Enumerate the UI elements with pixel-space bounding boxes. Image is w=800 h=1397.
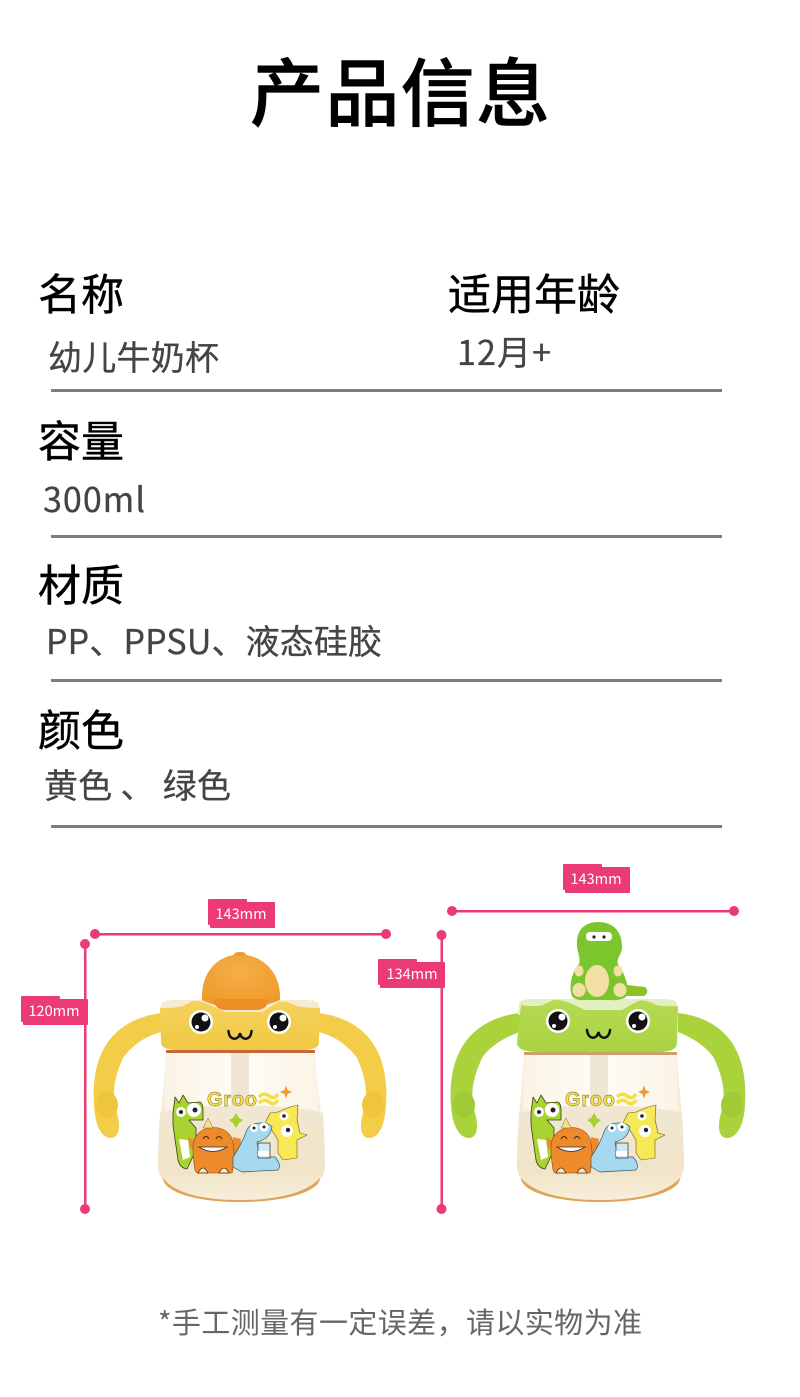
dimension: yellow width 143mm: 143mm: [216, 903, 266, 924]
cartoon print: [531, 1085, 665, 1173]
dimension: green height 134mm: [378, 930, 446, 1214]
spec: colour: 颜色: [38, 697, 124, 759]
dimension: yellow width 143mm: [90, 899, 391, 939]
spec: name: 幼儿牛奶杯: [48, 331, 219, 380]
cartoon print: [173, 1085, 307, 1173]
spec: age: 适用年龄: [448, 261, 620, 323]
green cup: [451, 922, 745, 1202]
title: 产品信息: [250, 35, 550, 142]
cup body: [158, 1052, 325, 1201]
handles: [451, 1013, 745, 1138]
dimension: yellow height 120mm: [21, 939, 90, 1214]
dimension: green height 134mm: 134mm: [386, 963, 438, 984]
face: [546, 1009, 650, 1038]
hat: [202, 952, 280, 1010]
dinosaur topper: [571, 922, 647, 1000]
cartoon print: Groo: [207, 1089, 257, 1111]
spec: colour: 黄色 、 绿色: [44, 759, 231, 808]
lid: [518, 999, 678, 1015]
handles: [94, 1013, 386, 1138]
spec: material: 材质: [38, 552, 124, 614]
face: [189, 1010, 291, 1039]
spec: capacity: [38, 408, 145, 522]
spec: name: 名称: [38, 261, 124, 323]
spec: age: [448, 261, 620, 375]
spec: material: PP、PPSU、液态硅胶: [46, 615, 382, 664]
spec: material: [38, 552, 382, 664]
spec: age: 12月+: [457, 326, 551, 375]
dimension: yellow height 120mm: 120mm: [28, 1000, 80, 1021]
cup body: [517, 1052, 684, 1201]
spec: colour: [38, 697, 231, 808]
spec: capacity: 300ml: [43, 473, 145, 522]
spec: capacity: 容量: [38, 408, 124, 470]
footnote: *手工测量有一定误差，请以实物为准: [158, 1300, 642, 1342]
dimension: green width 143mm: [447, 864, 739, 916]
dimension: green width 143mm: 143mm: [570, 868, 622, 889]
lid: [160, 1000, 320, 1015]
cartoon print: Groo: [565, 1089, 615, 1111]
yellow cup: [94, 952, 386, 1202]
spec: name: [38, 261, 219, 380]
